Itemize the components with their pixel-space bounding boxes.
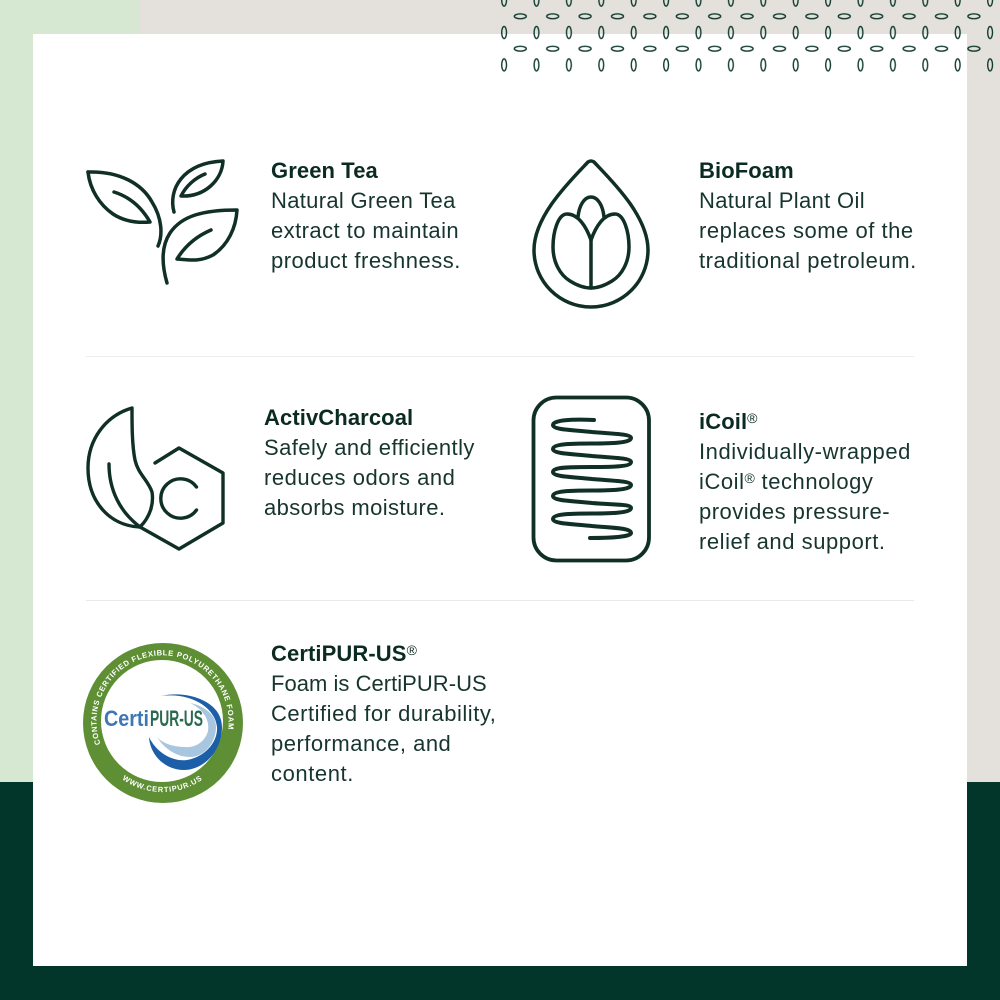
icon: CertiPUR-US badge: CONTAINS CERTIFIED FLEXIBLE POLYURETHANE FOAM	[91, 650, 234, 745]
text: BioFoam: traditional petroleum.	[699, 248, 917, 273]
icon: green tea leaves	[88, 161, 237, 283]
text: Green Tea	[271, 158, 461, 273]
text: iCoil: iCoil®	[699, 409, 758, 434]
text: BioFoam: BioFoam	[699, 158, 794, 183]
text: BioFoam	[699, 158, 917, 273]
text: Green Tea: Green Tea	[271, 158, 378, 183]
text: ActivCharcoal: ActivCharcoal	[264, 405, 413, 430]
text: iCoil	[699, 409, 911, 554]
text: CertiPUR-US: CertiPUR-US®	[271, 641, 417, 666]
background: dark green band	[0, 782, 1000, 1000]
icon: CertiPUR-US badge: WWW.CERTIPUR.US	[123, 774, 202, 792]
icon: CertiPUR-US badge	[83, 643, 243, 803]
background: light green block	[0, 0, 140, 782]
text: ActivCharcoal: reduces odors and	[264, 465, 455, 490]
text: CertiPUR-US: Foam is CertiPUR-US	[271, 671, 487, 696]
text: iCoil: Individually-wrapped	[699, 439, 911, 464]
text: CertiPUR-US: performance, and	[271, 731, 451, 756]
icon: coil in rounded rectangle	[534, 398, 649, 560]
icon: activated charcoal leaf and hexagon	[88, 408, 223, 549]
text: iCoil: provides pressure-	[699, 499, 890, 524]
text: Green Tea: product freshness.	[271, 248, 461, 273]
text: Green Tea: extract to maintain	[271, 218, 459, 243]
text: ActivCharcoal	[264, 405, 475, 520]
text: iCoil: iCoil® technology	[699, 469, 873, 494]
text: BioFoam: replaces some of the	[699, 218, 914, 243]
text: iCoil: relief and support.	[699, 529, 886, 554]
icon: CertiPUR-US badge: Certi	[104, 706, 149, 731]
text: BioFoam: Natural Plant Oil	[699, 188, 865, 213]
icon: CertiPUR-US badge: PUR-US	[150, 706, 203, 731]
decorative dot pattern	[496, 0, 994, 73]
text: ActivCharcoal: absorbs moisture.	[264, 495, 445, 520]
text: CertiPUR-US: Certified for durability,	[271, 701, 496, 726]
text: Green Tea: Natural Green Tea	[271, 188, 456, 213]
icon: biofoam drop with plant	[534, 161, 648, 307]
text: ActivCharcoal: Safely and efficiently	[264, 435, 475, 460]
text: CertiPUR-US: content.	[271, 761, 354, 786]
text: CertiPUR-US	[271, 641, 496, 786]
